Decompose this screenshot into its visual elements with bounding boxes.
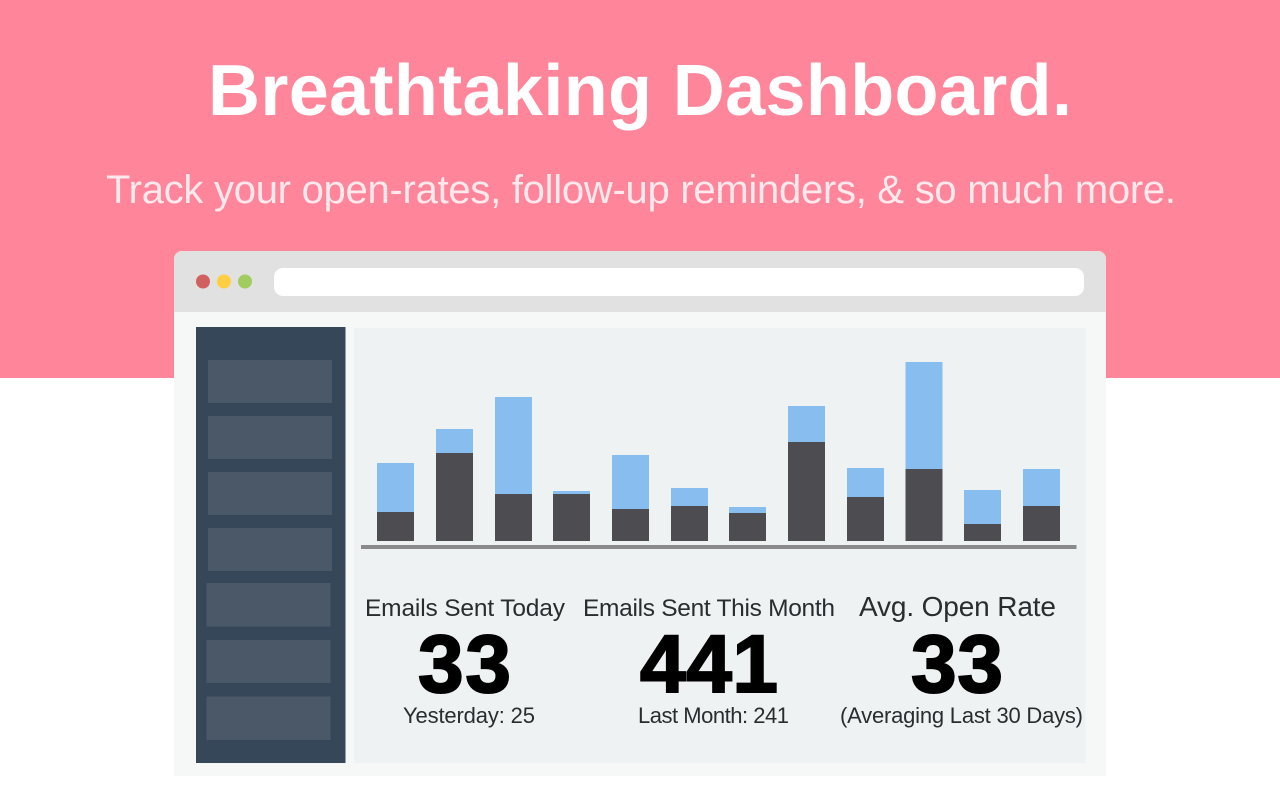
sidebar menu item 3: [208, 472, 332, 515]
stat comparison: (Averaging Last 30 Days): [840, 703, 1083, 728]
stat value: 33: [911, 619, 1003, 710]
hero banner: [0, 0, 1280, 378]
stacked bar chart: [361, 362, 1076, 549]
sidebar menu item 5: [206, 583, 330, 626]
stat value: 33: [418, 619, 511, 710]
bar 5: [612, 455, 649, 541]
window control: maximize: [238, 274, 252, 288]
browser frame: [174, 251, 1106, 776]
sidebar menu item 4: [208, 528, 332, 571]
bar 6: [671, 488, 708, 541]
bar 4: [553, 491, 590, 541]
bar 2: [436, 429, 473, 541]
title: Breathtaking Dashboard.: [208, 51, 1072, 131]
subtitle: Track your open-rates, follow-up reminders, & so much more.: [106, 168, 1176, 212]
stat: average open rate: [840, 591, 1083, 728]
stat comparison: Yesterday: 25: [403, 703, 535, 728]
stat label: Avg. Open Rate: [859, 591, 1056, 622]
bar 12: [1023, 469, 1060, 541]
stat: emails sent today: [365, 595, 566, 728]
bar 1: [377, 463, 414, 541]
sidebar menu item 1: [208, 360, 332, 403]
window control: minimize: [217, 274, 231, 288]
sidebar menu item 2: [208, 416, 332, 459]
sidebar: [196, 327, 346, 763]
stat comparison: Last Month: 241: [638, 703, 789, 728]
sidebar menu item 7: [206, 696, 330, 740]
stat value: 441: [640, 619, 778, 710]
browser window: [174, 251, 1106, 776]
bar 7: [729, 507, 766, 541]
sidebar menu item 6: [206, 640, 330, 683]
stat label: Emails Sent Today: [365, 595, 566, 622]
bar 10: [906, 362, 942, 541]
window control: close: [196, 274, 210, 288]
bar 8: [788, 406, 825, 541]
browser toolbar: [174, 251, 1106, 312]
stat: emails sent this month: [583, 595, 835, 728]
chart axis: [361, 545, 1076, 549]
bar 9: [847, 468, 884, 541]
bar 11: [964, 490, 1001, 541]
address bar: [274, 268, 1084, 296]
stat label: Emails Sent This Month: [583, 595, 835, 622]
main content panel: [354, 328, 1086, 763]
bar 3: [495, 397, 532, 541]
